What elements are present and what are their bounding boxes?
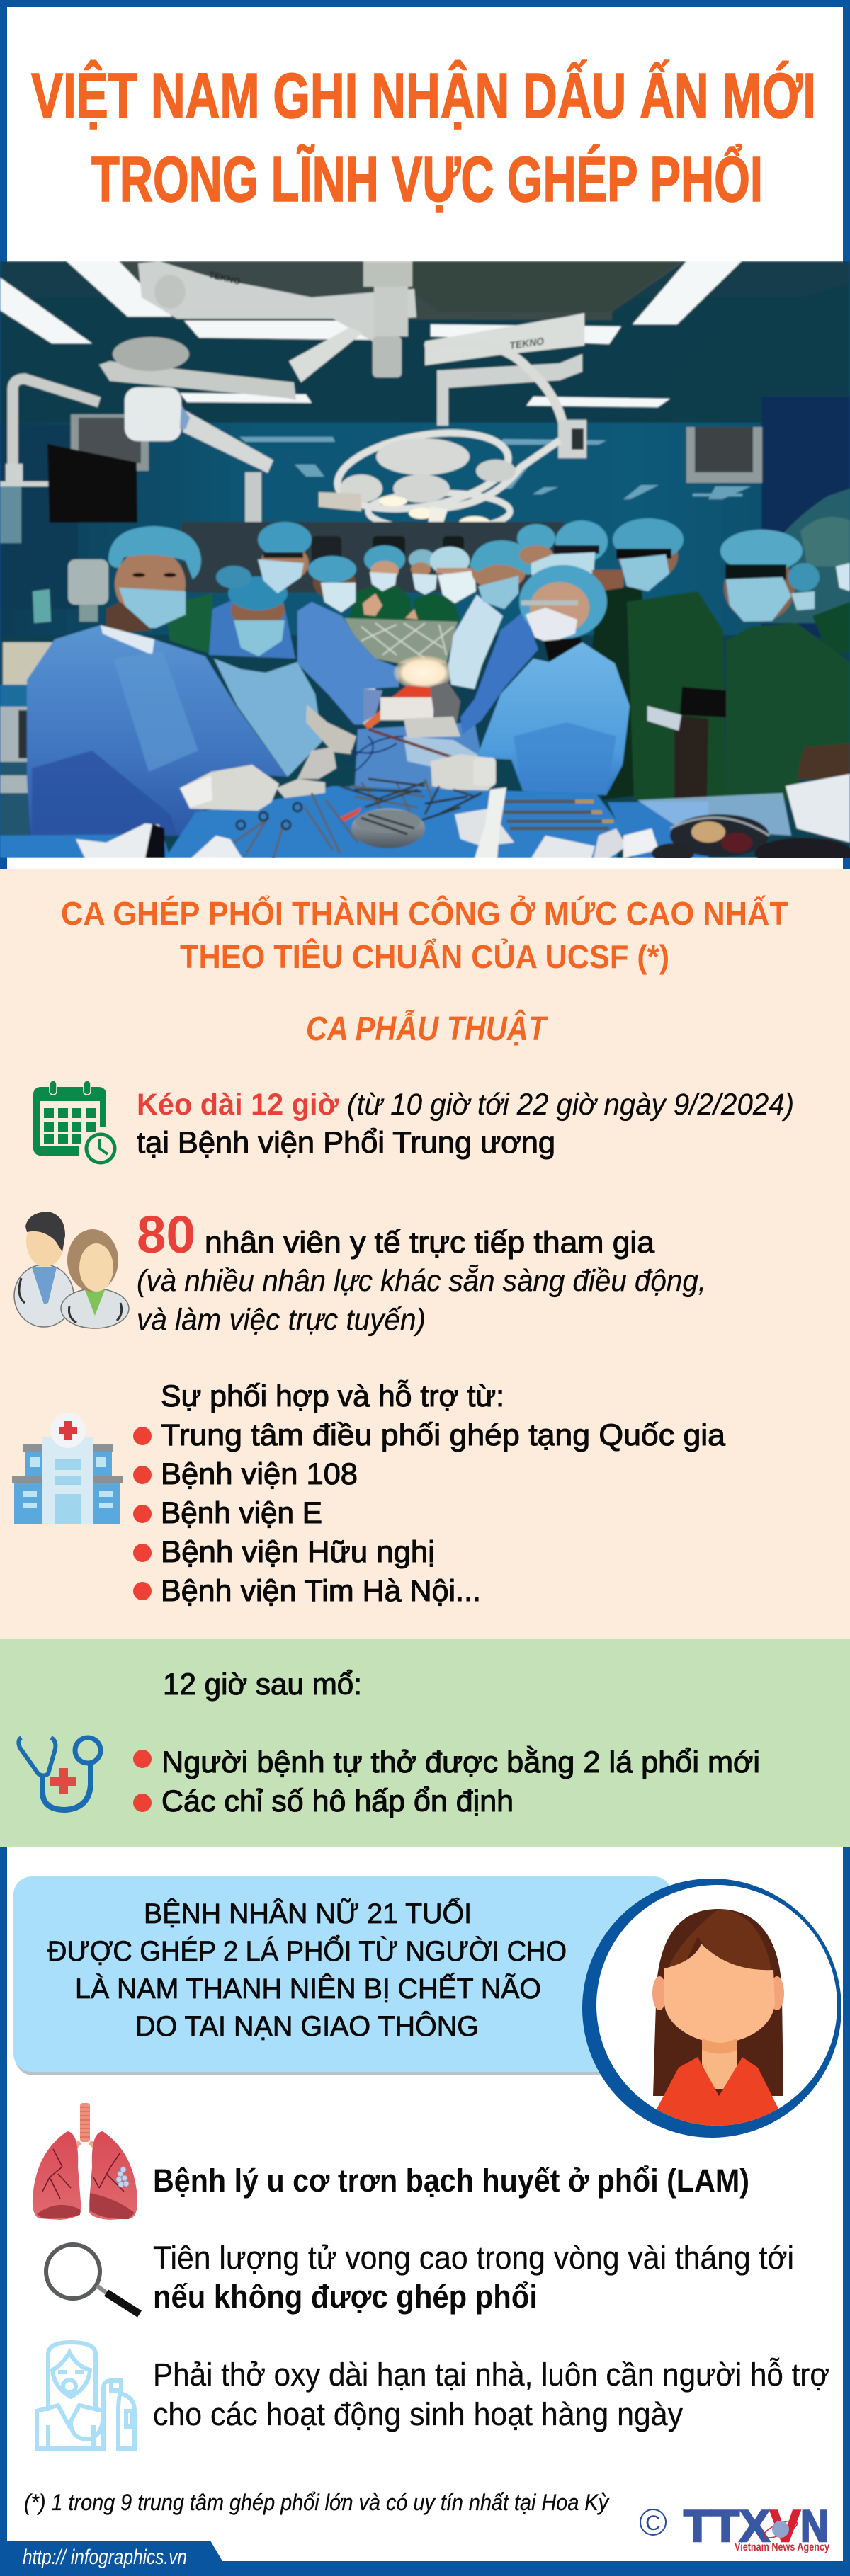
icon: patient with oxygen <box>37 2342 135 2449</box>
instrument table drape <box>0 834 170 858</box>
IV bottles <box>0 486 21 543</box>
subheading: THEO TIÊU CHUẨN CỦA UCSF (*) <box>180 938 669 975</box>
text: duration: (từ 10 giờ tới 22 giờ ngày 9/2/2024) <box>347 1088 794 1122</box>
surgical instruments <box>234 779 475 860</box>
text: after surgery: Các chỉ số hô hấp ổn định <box>162 1784 514 1818</box>
plastic sheet and surgical field <box>344 618 489 800</box>
wall reflections <box>239 437 751 499</box>
text on arm: TEKNO <box>208 269 242 287</box>
equipment arms <box>0 261 586 523</box>
text: coordination list <box>133 1379 725 1608</box>
icon: lungs <box>33 2103 137 2220</box>
white gown surgeon <box>448 595 503 689</box>
footer bar with website <box>0 2541 850 2576</box>
person with glasses at back <box>258 522 312 593</box>
callout: patient description: DO TAI NẠN GIAO THÔNG <box>135 2010 479 2042</box>
back wall door panel <box>181 522 564 593</box>
section heading: the surgery: CA PHẪU THUẬT <box>306 1009 548 1048</box>
text: oxygen dependence: cho các hoạt động sinh hoạt hàng ngày <box>153 2396 683 2432</box>
text: staff: (và nhiều nhân lực khác sẵn sàng điều động, <box>137 1264 706 1298</box>
text: coordination list: Bệnh viện Tim Hà Nội... <box>161 1574 481 1608</box>
photo: surgical team in operating room <box>0 261 850 869</box>
text: staff: nhân viên y tế trực tiếp tham gia <box>205 1226 654 1260</box>
logo: TTXVN: C <box>645 2512 661 2535</box>
logo: TTXVN <box>640 2502 829 2553</box>
surgeon in white mask, blue gown <box>298 556 399 728</box>
icon: magnifying glass <box>46 2245 140 2314</box>
logo: TTXVN: TTX <box>684 2502 770 2551</box>
text: staff: 80 <box>137 1205 196 1264</box>
panel: 12 hours after surgery (green) <box>0 1639 850 1847</box>
logo: TTXVN: V <box>770 2502 800 2551</box>
text: coordination list: Bệnh viện 108 <box>161 1457 358 1491</box>
icon: calendar with clock <box>33 1081 115 1163</box>
text: duration: tại Bệnh viện Phổi Trung ương <box>137 1126 555 1160</box>
back right head <box>517 520 623 591</box>
text: oxygen dependence <box>153 2356 829 2432</box>
subheading: CA GHÉP PHỔI THÀNH CÔNG Ở MỨC CAO NHẤT <box>61 895 788 932</box>
left equipment <box>3 642 52 685</box>
text: coordination list: Trung tâm điều phối ghép tạng Quốc gia <box>161 1418 725 1452</box>
text: prognosis: Tiên lượng tử vong cao trong vòng vài tháng tới <box>153 2240 794 2276</box>
text: after surgery <box>133 1668 760 1818</box>
surgical lamp <box>332 428 561 523</box>
text: after surgery: 12 giờ sau mổ: <box>163 1668 362 1702</box>
surgeon: left large <box>27 526 288 836</box>
text: staff: và làm việc trực tuyến) <box>137 1303 426 1337</box>
text: coordination list: Bệnh viện E <box>161 1496 322 1530</box>
icon: patient portrait <box>582 1879 842 2138</box>
panel: surgery details (peach) <box>0 869 850 1639</box>
gloves of main surgeon <box>180 765 279 811</box>
text: coordination list: Bệnh viện Hữu nghị <box>161 1535 435 1569</box>
green team head 1 <box>613 518 684 591</box>
callout: patient description: ĐƯỢC GHÉP 2 LÁ PHỔI TỪ NGƯỜI CHO <box>47 1934 567 1967</box>
vents and monitor <box>71 414 149 471</box>
callout: patient description: BỆNH NHÂN NỮ 21 TUỔI <box>144 1896 472 1930</box>
callout: patient description: LÀ NAM THANH NIÊN BỊ CHẾT NÃO <box>75 1972 541 2005</box>
text: staff <box>137 1205 706 1337</box>
text: prognosis: nếu không được ghép phổi <box>153 2279 538 2315</box>
nurse <box>209 576 356 779</box>
plastic bag and bowls right <box>638 793 791 836</box>
green team head 2 <box>720 530 850 622</box>
woman in white mask <box>431 565 630 797</box>
IV bags and notes <box>68 559 108 605</box>
instrument rows <box>504 802 613 828</box>
text: coordination list: Sự phối hợp và hỗ trợ từ: <box>161 1379 504 1413</box>
bottom left device and gauze <box>76 823 165 858</box>
callout: patient description <box>13 1876 674 2075</box>
icon: stethoscope <box>18 1738 101 1810</box>
text: disease: Bệnh lý u cơ trơn bạch huyết ở phổi (LAM) <box>153 2162 749 2199</box>
text: duration: Kéo dài 12 giờ <box>137 1088 339 1122</box>
back team heads <box>363 545 476 620</box>
syringe <box>475 787 506 858</box>
text: duration <box>137 1088 794 1160</box>
footnote: (*) 1 trong 9 trung tâm ghép phổi lớn và có uy tín nhất tại Hoa Kỳ <box>24 2490 610 2515</box>
blue gown surgeon <box>460 540 538 734</box>
title <box>31 59 816 215</box>
text: after surgery: Người bệnh tự thở được bằng 2 lá phổi mới <box>162 1745 760 1779</box>
icon: hospital <box>12 1413 123 1524</box>
back row green scrubs <box>165 593 214 655</box>
photo: surgical team in operating room: TEKNO <box>509 335 545 351</box>
icon: doctors <box>14 1212 129 1328</box>
text: prognosis <box>153 2240 794 2315</box>
logo: TTXVN: N <box>800 2502 829 2551</box>
subheading <box>61 895 788 975</box>
ceiling lights <box>0 261 742 407</box>
footer bar with website: http:// infographics.vn <box>23 2546 187 2569</box>
